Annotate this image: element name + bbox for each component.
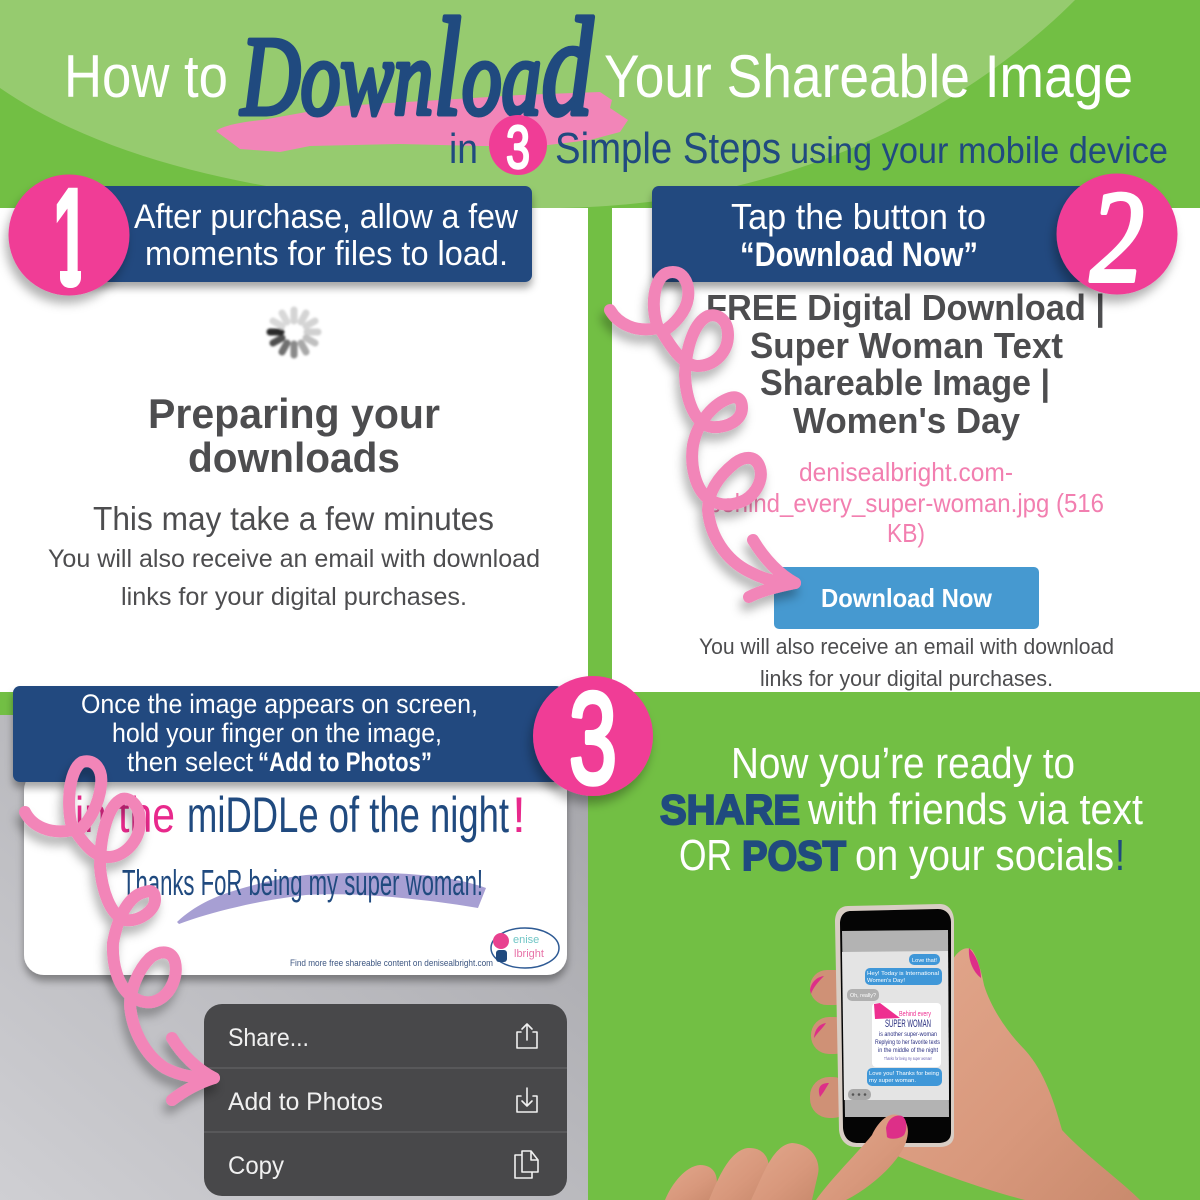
text: email note: You will also receive an email with download [699,634,1114,659]
banner: step 3 instruction: hold your finger on the image, [112,718,442,748]
phone: smartphone: my super woman. [869,1078,917,1084]
menu: share options [204,1004,567,1196]
icon: copy [515,1151,538,1178]
banner: step 1 instruction: moments for files to load. [145,235,508,273]
heading: product title: Super Woman Text [750,325,1063,366]
text: ready to share [660,739,1143,880]
text: ready to share: Now you’re ready to [731,739,1075,788]
heading: product title: FREE Digital Download | [706,287,1105,329]
chat bubbles [865,954,942,1086]
arrow: swirl to add to photos [25,761,214,1100]
title: how to download your shareable image [64,0,1133,152]
card: shared image preview [24,770,567,975]
badge: step 1: 1 [53,159,89,318]
text: ready to share: SHARE [660,786,800,833]
hand: pointing hand [665,1114,908,1200]
icon: logo: lbright [514,948,544,960]
icon: logo: enise [513,934,539,946]
shared image thumbnail: Behind every [899,1011,931,1018]
shared image thumbnail: is another super-woman [879,1032,937,1038]
card: shared image preview: miDDLe of the night [187,787,509,843]
icon: share [517,1024,537,1048]
text: file link [708,457,1104,548]
heading: product title [706,287,1105,441]
banner: step 3 instruction [13,686,563,782]
card: shared image preview: Thanks FoR being my super woman! [122,862,483,903]
phone: smartphone: Oh, really? [850,993,876,999]
icon: loading spinner [270,310,318,355]
banner: step 2 instruction: Tap the button to [731,196,986,237]
card: shared image preview: Find more free shareable content on denisealbright.com [290,958,493,969]
fingernails on holding hand [810,948,981,1097]
heading: product title: Women's Day [793,400,1020,441]
shared image thumbnail: in the middle of the night [878,1047,938,1054]
banner: step 2 instruction [652,186,1102,282]
card: shared image preview: ! [512,787,526,843]
button: download now [774,567,1039,629]
illustration: hands holding phone [665,904,1140,1200]
subtitle: in 3 simple steps using your mobile device: using your mobile device [790,130,1168,171]
panel: step 2 download screen [612,208,1200,692]
text: email note [699,634,1114,691]
shared image thumbnail: Replying to her favorite texts [875,1039,941,1046]
button: download now: Download Now [821,583,993,613]
heading: preparing your downloads [148,390,440,481]
banner: step 3 instruction: Once the image appears on screen, [81,689,478,719]
menu: share options: Share... [228,1024,309,1052]
text: email note: links for your digital purchases. [760,666,1053,691]
text: file link: denisealbright.com- [799,457,1013,487]
panel: step 3 phone screen [0,715,588,1200]
title: how to download your shareable image: Your Shareable Image [604,43,1133,110]
text: ready to share: with friends via text [807,785,1143,834]
text: ready to share: POST [742,832,846,879]
subtitle: in 3 simple steps using your mobile device: in [449,125,478,172]
badge: step 2 [1056,163,1178,310]
heading: preparing your downloads: Preparing your [148,390,440,437]
banner: step 3 instruction: “Add to Photos” [258,747,432,777]
icon: logo [491,928,559,968]
badge: step 2: 2 [1090,163,1144,310]
banner: step 2 instruction: “Download Now” [740,236,978,274]
decoration: pink brush stroke [216,92,628,152]
text: wait message [48,500,540,611]
menu: share options: Copy [228,1152,284,1180]
heading: product title: Shareable Image | [760,362,1050,404]
text: ready to share: OR [679,831,732,880]
phone: smartphone: Love that! [912,958,937,964]
text: wait message: You will also receive an email with download [48,545,540,573]
text: ready to share: on your socials [855,831,1114,880]
text: file link: behind_every_super-woman.jpg (516 [708,488,1104,518]
text: wait message: This may take a few minutes [93,500,494,537]
text: ready to share: ! [1115,831,1125,880]
banner: step 1 instruction: After purchase, allow a few [134,198,518,236]
shared image thumbnail: SUPER WOMAN [885,1018,931,1030]
card: shared image preview: in the [75,787,175,843]
badge: 3 [489,114,547,181]
menu: share options: Add to Photos [228,1088,383,1116]
shared image thumbnail: Thanks for being my super woman! [884,1056,932,1061]
subtitle: in 3 simple steps using your mobile device [449,114,1168,181]
hand: rear fingers [810,970,853,1118]
phone: smartphone: Love you! Thanks for being [869,1071,939,1077]
arrow: swirl to download button [610,272,795,597]
typing indicator [848,1089,871,1100]
badge: 3: 3 [506,114,530,181]
fingernail on pointing finger [886,1116,906,1139]
banner: step 1 instruction [85,186,532,282]
hand: holding hand [895,948,1140,1200]
icon: add to photos [517,1088,537,1112]
text: file link: KB) [887,518,925,548]
subtitle: in 3 simple steps using your mobile device: Simple Steps [555,124,781,173]
text: wait message: links for your digital purchases. [121,583,467,611]
heading: preparing your downloads: downloads [188,434,400,481]
title: how to download your shareable image: How to [64,43,228,110]
phone: smartphone [835,904,954,1147]
badge: step 3: 3 [569,665,617,811]
badge: step 1 [8,159,130,318]
badge: step 3 [533,665,653,811]
banner: step 3 instruction: then select [127,747,253,777]
panel: step 1 preparing downloads [0,208,588,692]
phone: smartphone: Women's Day! [867,978,905,984]
shared image thumbnail [872,1003,941,1067]
phone: smartphone: Hey! Today is International [867,971,939,977]
